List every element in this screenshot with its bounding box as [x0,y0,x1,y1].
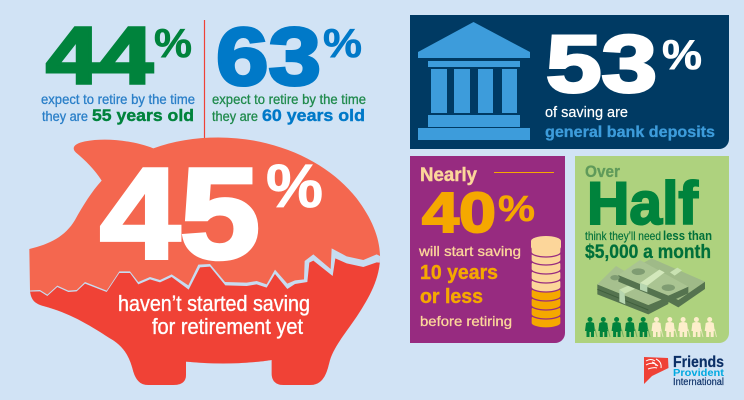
text: before retiring: before retiring [420,313,512,329]
caption: for retirement yet [152,314,303,339]
heading: half: Half [587,170,699,237]
caption line 1: think they’ll need [585,229,661,243]
pig body: upper saved part [29,137,380,385]
number 40: 40 [422,181,496,245]
logo: Friends Provident International [644,354,725,388]
text: or less: or less [420,286,483,308]
caption line 2: 55 years old [92,106,194,125]
percent sign: % [323,20,362,66]
panel: bank deposits [410,15,729,149]
logo wordmark [673,354,725,388]
caption line 1: less than [663,228,712,243]
logo rose [644,357,668,384]
caption: haven’t started saving [118,291,310,316]
caption [118,291,310,339]
number 63: 63 [216,12,321,102]
caption line 1: expect to retire by the time [212,91,366,107]
logo wordmark: Provident [673,367,725,379]
pictogram: ten retirees, five highlighted [585,317,716,337]
number 45: 45 [100,142,260,286]
caption line 1: expect to retire by the time [41,91,195,107]
percent sign: % [266,152,323,220]
icon: bank building [418,22,530,140]
stat: 63 percent [212,12,366,125]
caption line 2: they are [42,108,88,124]
caption line 2: $5,000 a month [585,242,711,263]
caption line 1 [585,228,712,243]
text: will start saving: will start saving [418,243,521,259]
caption line 2: 60 years old [262,106,365,125]
heading: over: Over [585,162,620,181]
caption line 2 [212,106,365,125]
stat: 44 percent [41,12,195,125]
number 44: 44 [46,12,153,102]
caption: of saving are [545,104,628,121]
logo wordmark: International [673,377,724,388]
text: 10 years: 10 years [420,262,498,284]
panel: over half [575,156,729,343]
caption line 2: they are [212,108,258,124]
heading: nearly: Nearly [420,165,477,186]
percent sign: % [662,31,702,78]
logo wordmark: Friends [673,354,724,371]
percent sign: % [498,188,535,229]
number 53: 53 [546,20,657,110]
icon: stacks of banknotes [597,258,705,314]
piggy bank [27,137,387,397]
percent sign: % [154,20,192,66]
icon: coin stack [531,236,561,328]
caption line 2 [42,106,194,125]
highlighted caption: general bank deposits [545,124,715,141]
pig body: lower torn part [30,248,380,385]
panel: nearly 40 percent [410,156,565,343]
